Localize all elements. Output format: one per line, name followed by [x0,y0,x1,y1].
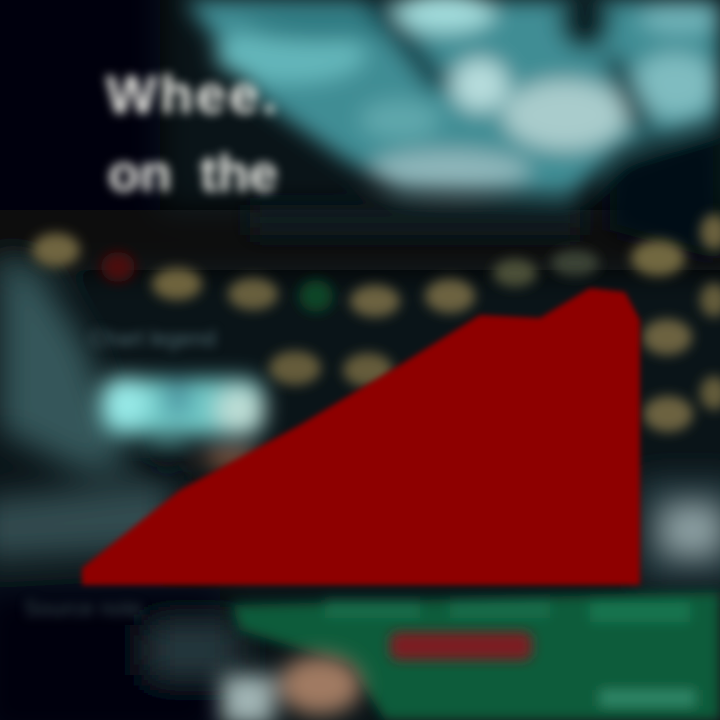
caption: mid-left: Chart legend [90,326,216,351]
hand [222,655,362,720]
glowing panel [100,376,265,468]
green table [232,592,720,720]
title: Whee. [106,65,280,125]
red label [390,632,532,660]
caption: bottom-left: Source note [24,596,143,621]
subtitle line: on the [108,145,278,203]
red area chart [82,288,640,585]
